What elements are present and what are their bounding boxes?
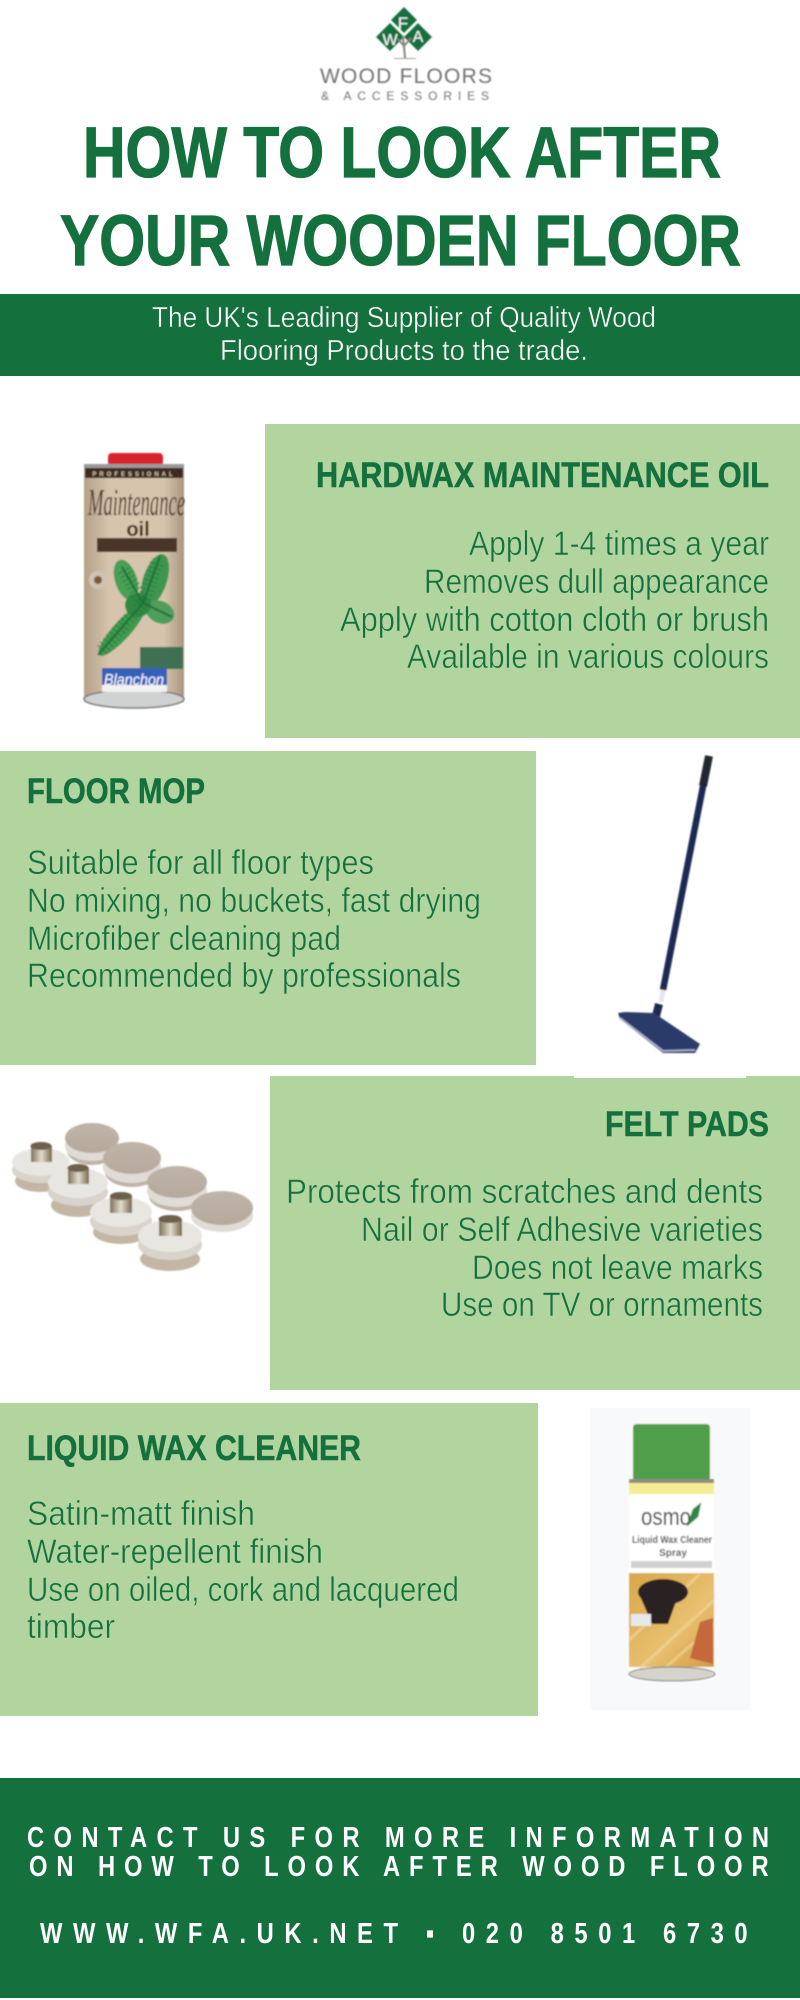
- image: maintenance oil tin: PROFESSIONAL: [92, 472, 176, 478]
- footer contact band: CONTACT US FOR MORE INFORMATION: [27, 1821, 769, 1854]
- metal pins: [12, 1142, 202, 1271]
- panel: felt pads: Does not leave marks: [472, 1249, 763, 1287]
- footer contact band: ON HOW TO LOOK AFTER WOOD FLOOR: [29, 1850, 769, 1883]
- panel: liquid wax cleaner: [0, 1403, 538, 1716]
- panel: floor mop: Suitable for all floor types: [27, 844, 374, 882]
- panel: felt pads: Protects from scratches and dents: [286, 1173, 763, 1211]
- panel: felt pads: Nail or Self Adhesive varieties: [361, 1211, 763, 1249]
- image: osmo spray can: osmo: [641, 1504, 691, 1531]
- panel: felt pads: Use on TV or ornaments: [441, 1286, 763, 1324]
- panel: felt pads: [270, 1076, 800, 1390]
- text: Maintenance: [88, 482, 185, 524]
- panel: liquid wax cleaner: Satin-matt finish: [27, 1495, 255, 1533]
- panel: hardwax maintenance oil: Apply 1-4 times a year: [469, 525, 769, 563]
- image: osmo spray can: Liquid Wax Cleaner: [632, 1535, 712, 1546]
- image: maintenance oil tin: Blanchon: [104, 672, 164, 689]
- subtitle band: [0, 294, 800, 376]
- panel: hardwax maintenance oil: [265, 424, 800, 738]
- logo wordmark: WOOD FLOORS: [320, 65, 492, 88]
- logo wordmark: & ACCESSORIES: [321, 89, 489, 103]
- footer contact band: [0, 1778, 800, 1998]
- icon: logo diamonds and tree: [376, 7, 432, 58]
- panel: floor mop: No mixing, no buckets, fast drying: [27, 882, 481, 920]
- pine branch: [93, 551, 178, 661]
- logo: [320, 7, 492, 103]
- subtitle band: Flooring Products to the trade.: [220, 335, 588, 367]
- panel: liquid wax cleaner: LIQUID WAX CLEANER: [27, 1429, 361, 1468]
- felt discs: [65, 1123, 253, 1232]
- subtitle band: The UK's Leading Supplier of Quality Wood: [152, 302, 656, 334]
- icon: logo diamonds and tree: F: [398, 14, 408, 33]
- panel: liquid wax cleaner: Water-repellent finish: [27, 1533, 323, 1571]
- icon: logo diamonds and tree: W: [382, 32, 398, 49]
- panel: floor mop: FLOOR MOP: [27, 772, 205, 811]
- image: osmo spray can: Spray: [659, 1548, 687, 1559]
- panel: hardwax maintenance oil: Apply with cotton cloth or brush: [340, 601, 769, 639]
- icon: logo diamonds and tree: A: [413, 29, 424, 46]
- image: floor mop: [618, 756, 709, 1053]
- footer contact band: WWW.WFA.UK.NET ▪ 020 8501 6730: [40, 1917, 748, 1950]
- image: felt pads: [12, 1123, 253, 1271]
- panel: liquid wax cleaner: timber: [27, 1608, 115, 1646]
- image: osmo spray can: [590, 1408, 750, 1710]
- image: maintenance oil tin: oil: [126, 519, 150, 541]
- panel: floor mop: [0, 751, 536, 1065]
- panel: floor mop: Recommended by professionals: [27, 957, 461, 995]
- logo wordmark: [320, 65, 492, 103]
- image: maintenance oil tin: [84, 453, 185, 708]
- title: [60, 114, 741, 281]
- panel: liquid wax cleaner: Use on oiled, cork and lacquered: [27, 1571, 459, 1609]
- panel: floor mop: Microfiber cleaning pad: [27, 920, 341, 958]
- panel: felt pads: FELT PADS: [605, 1105, 769, 1144]
